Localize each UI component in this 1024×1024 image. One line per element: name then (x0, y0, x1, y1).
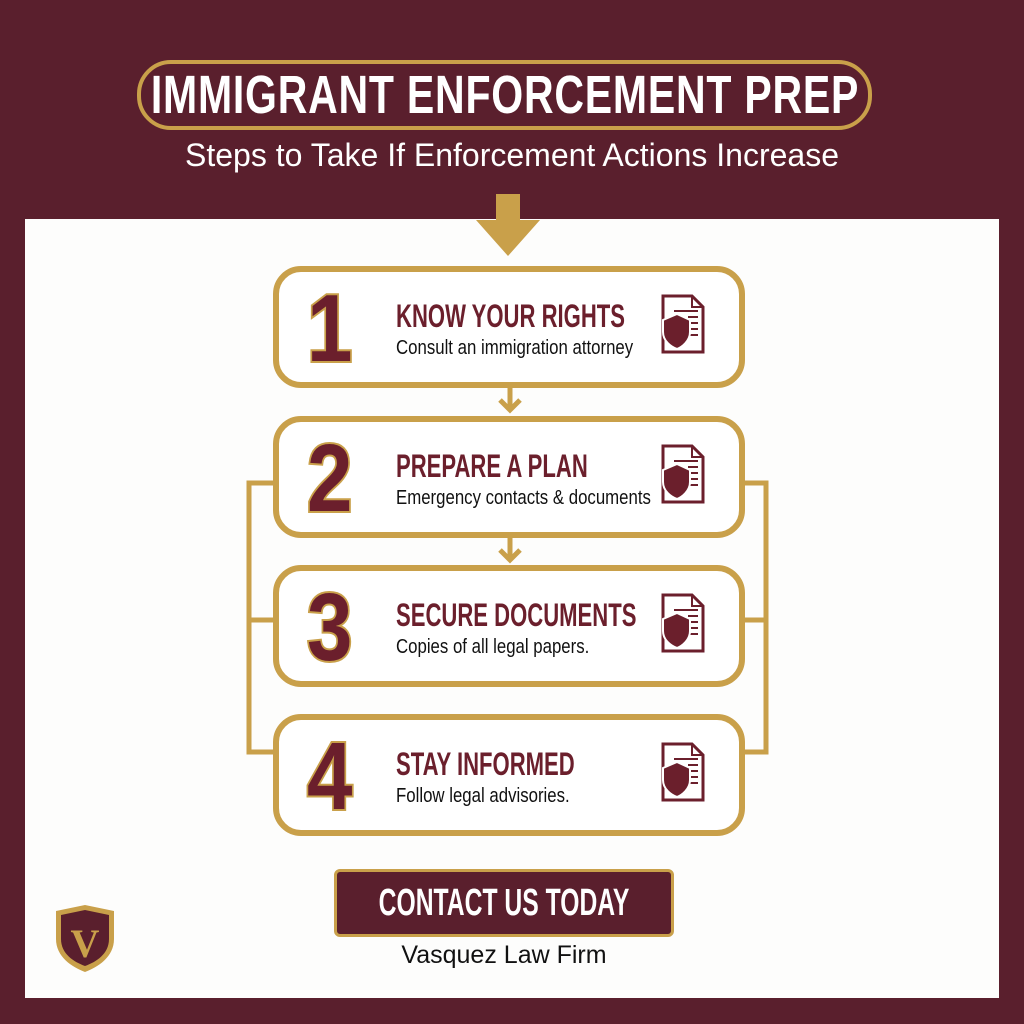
icon: document shield (662, 594, 704, 652)
step 4 (273, 714, 745, 836)
arrow: down (476, 194, 540, 256)
step 1: Consult an immigration attorney (396, 337, 633, 359)
step 2 (273, 416, 745, 538)
step 3: Copies of all legal papers. (396, 636, 589, 658)
firm name: Vasquez Law Firm (401, 941, 607, 969)
subtitle: Steps to Take If Enforcement Actions Increase (185, 137, 839, 173)
white panel (25, 219, 999, 998)
icon: document shield (662, 742, 704, 802)
step 3: 3 (307, 574, 352, 681)
step 3 (273, 565, 745, 687)
icon: document shield (662, 444, 704, 504)
title: IMMIGRANT ENFORCEMENT PREP (150, 65, 859, 125)
icon: document shield (662, 294, 704, 354)
step 4: STAY INFORMED (396, 746, 575, 782)
step 2: PREPARE A PLAN (396, 448, 588, 484)
logo: shield: V (71, 921, 100, 966)
step 3: SECURE DOCUMENTS (396, 597, 636, 633)
step 1: KNOW YOUR RIGHTS (396, 298, 625, 334)
step 2: 2 (307, 425, 352, 532)
contact button (334, 869, 674, 937)
connectors (246, 388, 768, 754)
step 4: Follow legal advisories. (396, 785, 570, 807)
contact button: CONTACT US TODAY (379, 882, 629, 924)
step 1 (273, 266, 745, 388)
step 1: 1 (307, 275, 352, 382)
step 2: Emergency contacts & documents (396, 487, 651, 509)
logo: shield (56, 905, 114, 972)
step 4: 4 (307, 723, 352, 830)
